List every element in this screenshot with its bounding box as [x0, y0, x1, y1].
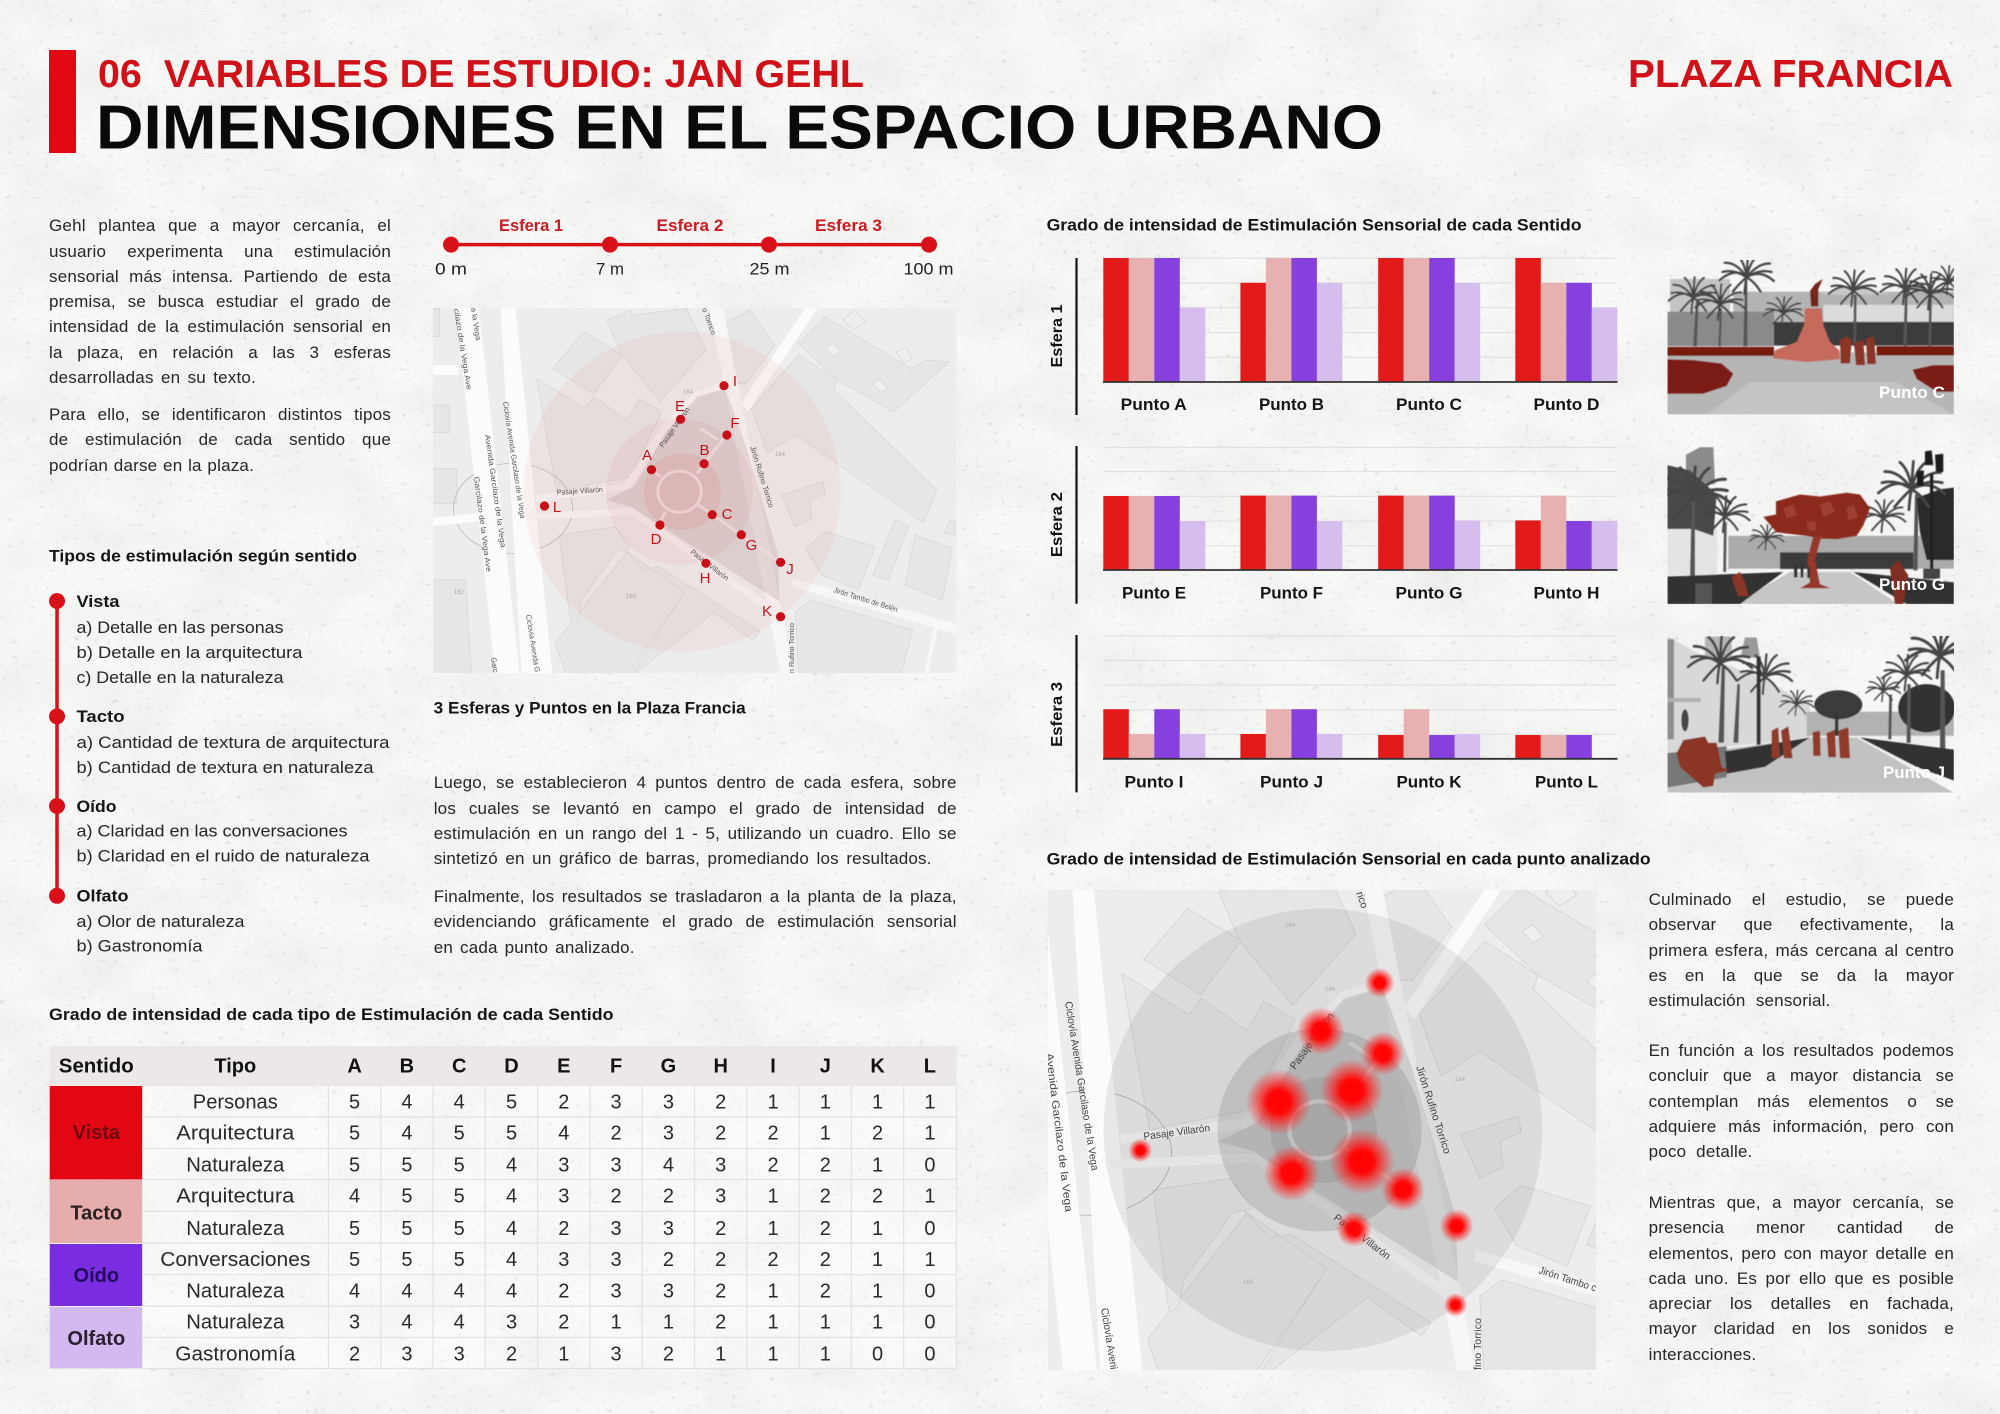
- row: Naturaleza (olfato): 3: [349, 1312, 360, 1334]
- table header: B: [400, 1056, 414, 1078]
- text block: conclusion 2: concluir que a mayor distancia se: [1649, 1066, 1954, 1085]
- text block: intro paragraph: intensidad de la estimulación sensorial en: [49, 317, 391, 336]
- row: Arquitectura (tacto): 4: [506, 1186, 517, 1208]
- text block: conclusion 1: Culminado el estudio, se puede: [1649, 890, 1954, 909]
- row: Naturaleza: [186, 1154, 935, 1176]
- row: Personas: Personas: [193, 1092, 278, 1114]
- bar chart: esfera 2: [1049, 446, 1618, 604]
- point letters: K: [762, 603, 772, 620]
- row: Conversaciones: 5: [454, 1249, 465, 1271]
- row: Naturaleza (tacto): [186, 1218, 935, 1240]
- table header: J: [820, 1056, 831, 1078]
- row: Naturaleza (tacto): 0: [924, 1218, 935, 1240]
- map caption: 3 Esferas y Puntos en la Plaza Francia: [434, 700, 747, 718]
- row: Personas: 1: [872, 1092, 883, 1114]
- point letters: F: [730, 415, 740, 432]
- timeline of spheres: Esfera 3: [815, 217, 882, 235]
- list: stimulation types per sense: Oído: [76, 798, 116, 816]
- list: stimulation types per sense: c) Detalle en la naturaleza: [76, 669, 284, 687]
- row: Naturaleza: Naturaleza: [186, 1154, 285, 1176]
- row: Arquitectura: 2: [715, 1123, 726, 1145]
- sense labels: Vista: [73, 1122, 121, 1144]
- map labels: Pasaje Villarón: [1331, 1212, 1393, 1262]
- map labels: 164: [683, 390, 694, 396]
- point letters: J: [786, 561, 794, 578]
- text block: results paragraph: [434, 887, 957, 957]
- table header: H: [713, 1056, 728, 1078]
- timeline of spheres: 100 m: [904, 260, 954, 278]
- section title: 06 VARIABLES DE ESTUDIO: JAN GEHL: [98, 53, 864, 96]
- row: Personas: 3: [663, 1092, 674, 1114]
- sense labels: Oído: [74, 1265, 119, 1287]
- row: Naturaleza: 0: [924, 1154, 935, 1176]
- text block: conclusion 2: [1649, 1041, 1954, 1161]
- row: Arquitectura: 1: [820, 1123, 831, 1145]
- text block: method paragraph: estimulación en un rango del 1 - 5, utilizando un cuadro. Ello se: [434, 824, 957, 843]
- row: Naturaleza: 2: [820, 1154, 831, 1176]
- row: Arquitectura (tacto): 3: [715, 1186, 726, 1208]
- timeline of spheres: 0 m: [435, 260, 467, 278]
- row: Conversaciones: 5: [401, 1249, 412, 1271]
- row: Personas: 1: [767, 1092, 779, 1114]
- row: Gastronomia: 0: [924, 1344, 935, 1366]
- heading: bar charts: Grado de intensidad de Estimulación Sensorial de cada Sentido: [1047, 217, 1582, 235]
- text block: intro paragraph: Gehl plantea que a mayor cercanía, el: [49, 216, 391, 235]
- table header: K: [870, 1056, 885, 1078]
- text block: conclusion 2: adquiere más información, pero con: [1649, 1117, 1954, 1136]
- row: Gastronomia: 3: [454, 1344, 465, 1366]
- row: Naturaleza: 3: [611, 1154, 622, 1176]
- map: three spheres and points: [433, 308, 956, 673]
- row: Personas: [193, 1092, 935, 1114]
- row: Naturaleza (olfato): 1: [767, 1312, 779, 1334]
- row: Naturaleza (olfato): 2: [558, 1312, 569, 1334]
- row: Naturaleza (olfato): 4: [401, 1312, 412, 1334]
- map labels: a la Vega: [469, 307, 483, 342]
- list: stimulation types per sense: Vista: [76, 593, 120, 611]
- heading: table: Grado de intensidad de cada tipo de Estimulación de cada Sentido: [49, 1006, 614, 1024]
- table header: E: [557, 1056, 570, 1078]
- row: Arquitectura: [176, 1123, 935, 1145]
- point letters: D: [651, 531, 662, 548]
- list: stimulation types per sense: a) Cantidad de textura de arquitectura: [76, 734, 390, 752]
- text block: conclusion 2: contemplan más elementos o se: [1649, 1092, 1954, 1111]
- row: Arquitectura (tacto): 1: [767, 1186, 779, 1208]
- row: Conversaciones: Conversaciones: [160, 1249, 310, 1271]
- sense labels: [67, 1122, 125, 1350]
- row: Personas: 3: [611, 1092, 622, 1114]
- text block: second intro paragraph: de estimulación de cada sentido que: [49, 430, 391, 449]
- text block: conclusion 2: En función a los resultados podemos: [1649, 1041, 1954, 1060]
- map labels: Avenida Garcilazo de la Vega: [1043, 1052, 1074, 1213]
- row: Naturaleza (oido): 4: [454, 1281, 465, 1303]
- text block: results paragraph: en cada punto analizado.: [434, 938, 635, 957]
- row: Arquitectura: 3: [663, 1123, 674, 1145]
- table header: I: [770, 1056, 776, 1078]
- row: Naturaleza (olfato): [186, 1312, 935, 1334]
- map labels: Jirón Tambo c: [1537, 1264, 1598, 1294]
- bar chart: esfera 1: Punto C: [1396, 396, 1462, 414]
- row: Naturaleza (oido): 4: [401, 1281, 412, 1303]
- text block: intro paragraph: usuario experimenta una estimulación: [49, 242, 391, 261]
- row: Naturaleza (tacto): 2: [820, 1218, 831, 1240]
- place name: PLAZA FRANCIA: [1628, 53, 1953, 96]
- bar chart: esfera 1: Esfera 1: [1049, 304, 1066, 367]
- row: Arquitectura (tacto): 4: [349, 1186, 360, 1208]
- timeline of spheres: 7 m: [596, 260, 624, 278]
- map labels: Ciclovía Avenida Garcilaso de la Vega: [501, 401, 527, 520]
- map: sensory intensity per point: [1048, 890, 1596, 1370]
- row: Naturaleza (tacto): 1: [872, 1218, 883, 1240]
- bar chart: esfera 3: [1049, 635, 1618, 792]
- map labels: n Rufino Torrico: [787, 623, 796, 673]
- row: Conversaciones: 3: [611, 1249, 622, 1271]
- row: Gastronomia: 2: [506, 1344, 517, 1366]
- map labels: Jirón Rufino Torrico: [1413, 1064, 1453, 1156]
- map labels: Pasaje Villarón: [657, 405, 692, 449]
- text block: conclusion 1: observar que efectivamente, la: [1649, 915, 1954, 934]
- photo: Punto C: [1667, 254, 1968, 414]
- row: Conversaciones: [160, 1249, 935, 1271]
- row: Conversaciones: 2: [663, 1249, 674, 1271]
- row: Naturaleza (tacto): 3: [611, 1218, 622, 1240]
- row: Arquitectura (tacto): 2: [872, 1186, 883, 1208]
- text block: second intro paragraph: [49, 405, 391, 474]
- row: Arquitectura (tacto): 2: [611, 1186, 622, 1208]
- list: stimulation types per sense: b) Gastronomía: [76, 937, 203, 955]
- timeline of spheres: 25 m: [750, 260, 790, 278]
- photo: Punto J: [1667, 636, 1954, 793]
- text block: conclusion 3: mayor claridad en los sonidos e: [1649, 1319, 1954, 1338]
- table header: C: [452, 1056, 466, 1078]
- timeline of spheres: Esfera 2: [656, 217, 724, 235]
- row: Naturaleza: 5: [401, 1154, 412, 1176]
- map labels: Jirón Rufino Torrico: [748, 445, 776, 509]
- table: intensity per type and point: [50, 1046, 957, 1368]
- row: Gastronomia: 1: [558, 1344, 569, 1366]
- row: Naturaleza (olfato): 1: [820, 1312, 831, 1334]
- timeline of spheres: [435, 217, 954, 278]
- row: Naturaleza: 4: [506, 1154, 517, 1176]
- text block: method paragraph: Luego, se establecieron 4 puntos dentro de cada esfera, sobre: [434, 773, 957, 792]
- text block: method paragraph: [434, 773, 957, 868]
- row: Naturaleza (tacto): 2: [715, 1218, 726, 1240]
- list: stimulation types per sense: b) Cantidad de textura en naturaleza: [76, 759, 374, 777]
- point letters: E: [675, 398, 685, 415]
- bar chart: esfera 3: Punto I: [1124, 773, 1184, 791]
- map labels: o Torrico: [700, 307, 718, 336]
- row: Arquitectura: Arquitectura: [176, 1123, 295, 1145]
- row: Conversaciones: 1: [872, 1249, 883, 1271]
- row: Gastronomia: 3: [611, 1344, 622, 1366]
- row: Naturaleza (tacto): 5: [349, 1218, 360, 1240]
- table header: G: [661, 1056, 676, 1078]
- point letters: B: [699, 442, 710, 459]
- bar chart: esfera 2: Punto E: [1122, 585, 1186, 603]
- row: Arquitectura (tacto): 1: [924, 1186, 935, 1208]
- list: stimulation types per sense: b) Claridad en el ruido de naturaleza: [76, 848, 370, 866]
- heading: heat map: Grado de intensidad de Estimulación Sensorial en cada punto analizado: [1047, 851, 1651, 869]
- text block: intro paragraph: desarrolladas en su texto.: [49, 368, 256, 387]
- map labels: Avenida Garcilazo de la Vega: [483, 434, 508, 549]
- point letters: [553, 373, 794, 620]
- row: Personas: 4: [401, 1092, 412, 1114]
- table header: F: [610, 1056, 622, 1078]
- row: Arquitectura: 2: [611, 1123, 622, 1145]
- photo label: Punto G: [1879, 576, 1945, 594]
- point letters: G: [746, 537, 757, 554]
- list: stimulation types per sense: a) Detalle en las personas: [76, 619, 284, 637]
- row: Personas: 5: [349, 1092, 360, 1114]
- row: Naturaleza: 5: [454, 1154, 465, 1176]
- text block: intro paragraph: [49, 216, 391, 387]
- text block: conclusion 2: poco detalle.: [1649, 1142, 1753, 1161]
- row: Naturaleza (olfato): 1: [611, 1312, 622, 1334]
- table header: A: [347, 1056, 362, 1078]
- text block: results paragraph: Finalmente, los resultados se trasladaron a la planta de la plaza,: [434, 887, 957, 906]
- text block: conclusion 3: [1649, 1193, 1954, 1364]
- bar chart: esfera 2: Punto H: [1534, 585, 1600, 603]
- row: Conversaciones: 1: [924, 1249, 935, 1271]
- map labels: cilazo de la Vega Ave: [452, 308, 474, 390]
- row: Naturaleza (oido): 2: [715, 1281, 726, 1303]
- table header: [59, 1056, 936, 1078]
- map labels: Ciclovía Avenida G: [524, 614, 542, 673]
- map labels: Ciclovía Avenida Garcilaso de la Vega: [1062, 1001, 1101, 1172]
- row: Conversaciones: 2: [767, 1249, 779, 1271]
- row: Naturaleza (tacto): 3: [663, 1218, 674, 1240]
- row: Personas: 4: [454, 1092, 465, 1114]
- row: Personas: 5: [506, 1092, 517, 1114]
- map labels: rico: [1353, 890, 1370, 910]
- row: Arquitectura (tacto): 2: [820, 1186, 831, 1208]
- row: Gastronomia: [175, 1344, 935, 1366]
- timeline of spheres: Esfera 1: [499, 217, 563, 235]
- text block: second intro paragraph: Para ello, se identificaron distintos tipos: [49, 405, 391, 424]
- map labels: Ciclovía Aveni: [1098, 1307, 1120, 1370]
- row: Naturaleza: 3: [558, 1154, 569, 1176]
- list: stimulation types per sense: Tacto: [76, 708, 124, 726]
- bar chart: esfera 2: Esfera 2: [1049, 492, 1066, 557]
- bar chart: esfera 2: Punto F: [1260, 585, 1323, 603]
- row: Naturaleza (tacto): 2: [558, 1218, 569, 1240]
- map labels: 164: [1455, 1077, 1466, 1083]
- row: Arquitectura: 5: [349, 1123, 360, 1145]
- map labels: Pasaje Villarón: [1288, 1010, 1337, 1072]
- bar chart: esfera 1: [1049, 258, 1618, 415]
- map labels: 164: [1325, 987, 1336, 993]
- text block: conclusion 1: es en la que se da la mayor: [1649, 966, 1954, 985]
- table header: D: [504, 1056, 519, 1078]
- text block: conclusion 1: primera esfera, más cercana al centro: [1649, 940, 1954, 960]
- row: Naturaleza (oido): 2: [820, 1281, 831, 1303]
- row: Naturaleza: 5: [349, 1154, 360, 1176]
- row: Arquitectura: 1: [924, 1123, 935, 1145]
- row: Naturaleza (tacto): Naturaleza: [186, 1218, 285, 1240]
- row: Naturaleza (oido): 1: [767, 1281, 779, 1303]
- row: Naturaleza (olfato): 4: [454, 1312, 465, 1334]
- row: Personas: 2: [715, 1092, 726, 1114]
- map labels: Garc: [489, 657, 500, 673]
- bar chart: esfera 1: Punto B: [1259, 396, 1324, 414]
- row: Arquitectura (tacto): 5: [401, 1186, 412, 1208]
- row: Arquitectura (tacto): 2: [663, 1186, 674, 1208]
- table header: Sentido: [59, 1056, 134, 1078]
- row: Gastronomia: Gastronomía: [175, 1344, 296, 1366]
- bar chart: esfera 3: Punto J: [1260, 773, 1323, 791]
- text block: conclusion 1: [1649, 890, 1954, 1010]
- list: stimulation types per sense: Olfato: [76, 888, 128, 906]
- text block: intro paragraph: la plaza, en relación a las 3 esferas: [49, 343, 391, 362]
- row: Arquitectura (tacto): Arquitectura: [176, 1186, 295, 1208]
- row: Gastronomia: 1: [820, 1344, 831, 1366]
- row: Naturaleza: 3: [715, 1154, 726, 1176]
- photo label: Punto J: [1883, 764, 1945, 782]
- text block: method paragraph: sintetizó en un gráfico de barras, promediando los resultados.: [434, 849, 932, 868]
- map labels: fino Torrico: [1472, 1318, 1484, 1370]
- row: Naturaleza (olfato): 1: [663, 1312, 674, 1334]
- text block: intro paragraph: sensorial más intensa. Partiendo de esta: [49, 267, 391, 286]
- row: Naturaleza (olfato): 2: [715, 1312, 726, 1334]
- row: Naturaleza (oido): 2: [558, 1281, 569, 1303]
- row: Naturaleza (olfato): 1: [872, 1312, 883, 1334]
- row: Naturaleza (olfato): 0: [924, 1312, 935, 1334]
- row: Naturaleza (oido): [186, 1281, 935, 1303]
- row: Gastronomia: 3: [401, 1344, 412, 1366]
- row: Naturaleza (oido): Naturaleza: [186, 1281, 285, 1303]
- row: Arquitectura (tacto): [176, 1186, 935, 1208]
- photo label: Punto C: [1879, 384, 1945, 402]
- row: Naturaleza (olfato): Naturaleza: [186, 1312, 285, 1334]
- row: Gastronomia: 0: [872, 1344, 883, 1366]
- bar chart: esfera 3: Punto L: [1535, 773, 1598, 791]
- map labels: Pasaje Villarón: [557, 485, 603, 497]
- row: Naturaleza (oido): 4: [349, 1281, 360, 1303]
- list: stimulation types per sense: [49, 593, 390, 955]
- map labels: Pasaje Villarón: [689, 547, 731, 583]
- row: Arquitectura: 4: [401, 1123, 412, 1145]
- row: Arquitectura: 2: [872, 1123, 883, 1145]
- map labels: 163: [1243, 1280, 1254, 1286]
- header accent bar: [49, 50, 76, 153]
- text block: conclusion 3: interacciones.: [1649, 1344, 1756, 1364]
- point letters: I: [733, 373, 737, 390]
- map labels: [452, 307, 899, 673]
- row: Conversaciones: 4: [506, 1249, 517, 1271]
- point letters: C: [722, 506, 733, 523]
- row: Conversaciones: 3: [558, 1249, 569, 1271]
- row: Arquitectura (tacto): 3: [558, 1186, 569, 1208]
- row: Gastronomia: 1: [715, 1344, 726, 1366]
- row: Personas: 1: [924, 1092, 935, 1114]
- row: Arquitectura: 4: [558, 1123, 569, 1145]
- map labels: 162: [454, 590, 465, 596]
- row: Gastronomia: 2: [663, 1344, 674, 1366]
- map labels: 163: [626, 594, 637, 600]
- row: Naturaleza (oido): 4: [506, 1281, 517, 1303]
- map labels: 164: [1285, 923, 1296, 929]
- row: Naturaleza (tacto): 5: [401, 1218, 412, 1240]
- point letters: L: [553, 499, 561, 516]
- point letters: A: [642, 447, 652, 464]
- map labels: Pasaje Villarón: [1143, 1122, 1211, 1143]
- row: Naturaleza (oido): 3: [663, 1281, 674, 1303]
- table header: Tipo: [214, 1056, 256, 1078]
- row: Conversaciones: 2: [715, 1249, 726, 1271]
- text block: conclusion 3: elementos, pero con mayor detalle en: [1649, 1244, 1954, 1262]
- bar chart: esfera 3: Esfera 3: [1049, 681, 1066, 747]
- bar chart: esfera 1: Punto D: [1534, 396, 1600, 414]
- map labels: 164: [775, 452, 786, 458]
- row: Personas: 2: [558, 1092, 569, 1114]
- photo: Punto G: [1656, 447, 1954, 604]
- row: Arquitectura: 5: [454, 1123, 465, 1145]
- text block: conclusion 1: estimulación sensorial.: [1649, 991, 1831, 1010]
- row: Conversaciones: 2: [820, 1249, 831, 1271]
- main title: DIMENSIONES EN EL ESPACIO URBANO: [96, 94, 1383, 162]
- bar chart: esfera 1: Punto A: [1121, 396, 1187, 414]
- row: Naturaleza (olfato): 3: [506, 1312, 517, 1334]
- row: Gastronomia: 1: [767, 1344, 779, 1366]
- row: Arquitectura: 5: [506, 1123, 517, 1145]
- row: Naturaleza (tacto): 5: [454, 1218, 465, 1240]
- text block: conclusion 3: Mientras que, a mayor cercanía, se: [1649, 1193, 1954, 1212]
- text block: conclusion 3: apreciar los detalles en fachada,: [1649, 1294, 1954, 1313]
- table header: L: [924, 1056, 936, 1078]
- list: stimulation types per sense: b) Detalle en la arquitectura: [76, 644, 303, 662]
- row: Naturaleza (oido): 1: [872, 1281, 883, 1303]
- map labels: [1043, 890, 1598, 1370]
- sense labels: Tacto: [70, 1202, 122, 1224]
- row: Naturaleza: 1: [872, 1154, 883, 1176]
- row: Arquitectura (tacto): 5: [454, 1186, 465, 1208]
- heat spots: [1128, 968, 1474, 1317]
- text block: results paragraph: evidenciando gráficamente el grado de estimulación sensorial: [434, 912, 957, 931]
- heading: sense types: Tipos de estimulación según sentido: [49, 548, 357, 566]
- row: Personas: 1: [820, 1092, 831, 1114]
- text block: intro paragraph: premisa, se busca estudiar el grado de: [49, 292, 391, 311]
- text block: second intro paragraph: podrían darse en la plaza.: [49, 456, 254, 474]
- row: Naturaleza (tacto): 1: [767, 1218, 779, 1240]
- list: stimulation types per sense: a) Olor de naturaleza: [76, 913, 245, 931]
- point markers: [540, 381, 785, 621]
- row: Naturaleza (oido): 0: [924, 1281, 935, 1303]
- map labels: Garcilazo de la Vega Ave: [472, 476, 493, 572]
- text block: conclusion 3: cada uno. Es por ello que es posible: [1649, 1269, 1954, 1288]
- row: Naturaleza: 2: [767, 1154, 779, 1176]
- point letters: H: [700, 570, 710, 587]
- bar chart: esfera 2: Punto G: [1396, 585, 1462, 603]
- map labels: Jirón Tambo de Belén: [832, 585, 899, 614]
- text block: conclusion 3: presencia menor cantidad de: [1649, 1218, 1954, 1237]
- row: Arquitectura: 2: [767, 1123, 779, 1145]
- row: Gastronomia: 2: [349, 1344, 360, 1366]
- row: Conversaciones: 5: [349, 1249, 360, 1271]
- bar chart: esfera 3: Punto K: [1396, 773, 1462, 791]
- text block: method paragraph: los cuales se levantó en campo el grado de intensidad de: [434, 799, 957, 818]
- row: Naturaleza (oido): 3: [611, 1281, 622, 1303]
- list: stimulation types per sense: a) Claridad en las conversaciones: [76, 823, 348, 841]
- row: Naturaleza: 4: [663, 1154, 674, 1176]
- sense labels: Olfato: [67, 1328, 125, 1350]
- row: Naturaleza (tacto): 4: [506, 1218, 517, 1240]
